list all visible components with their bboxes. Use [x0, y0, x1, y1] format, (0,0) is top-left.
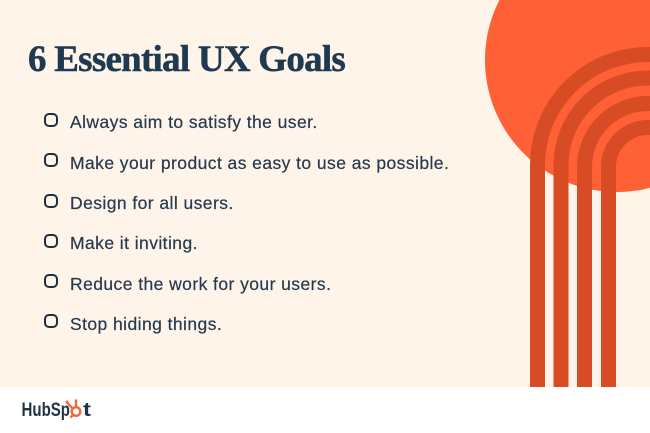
concentric arch stripes [538, 54, 650, 387]
checklist item 2: Make your product as easy to use as possible. [70, 152, 449, 172]
checklist item 1: Always aim to satisfy the user. [70, 112, 318, 132]
checklist item 4: Make it inviting. [70, 233, 198, 253]
title: 6 Essential UX Goals [28, 39, 345, 80]
orange circle [485, 0, 650, 192]
checklist item 5: Reduce the work for your users. [70, 274, 331, 294]
sprocket mark [66, 399, 80, 418]
checklist item 6: Stop hiding things. [70, 314, 222, 334]
HubSpot logo: t [83, 400, 92, 421]
checklist item 3: Design for all users. [70, 193, 234, 213]
HubSpot logo: HubSp [22, 400, 70, 421]
